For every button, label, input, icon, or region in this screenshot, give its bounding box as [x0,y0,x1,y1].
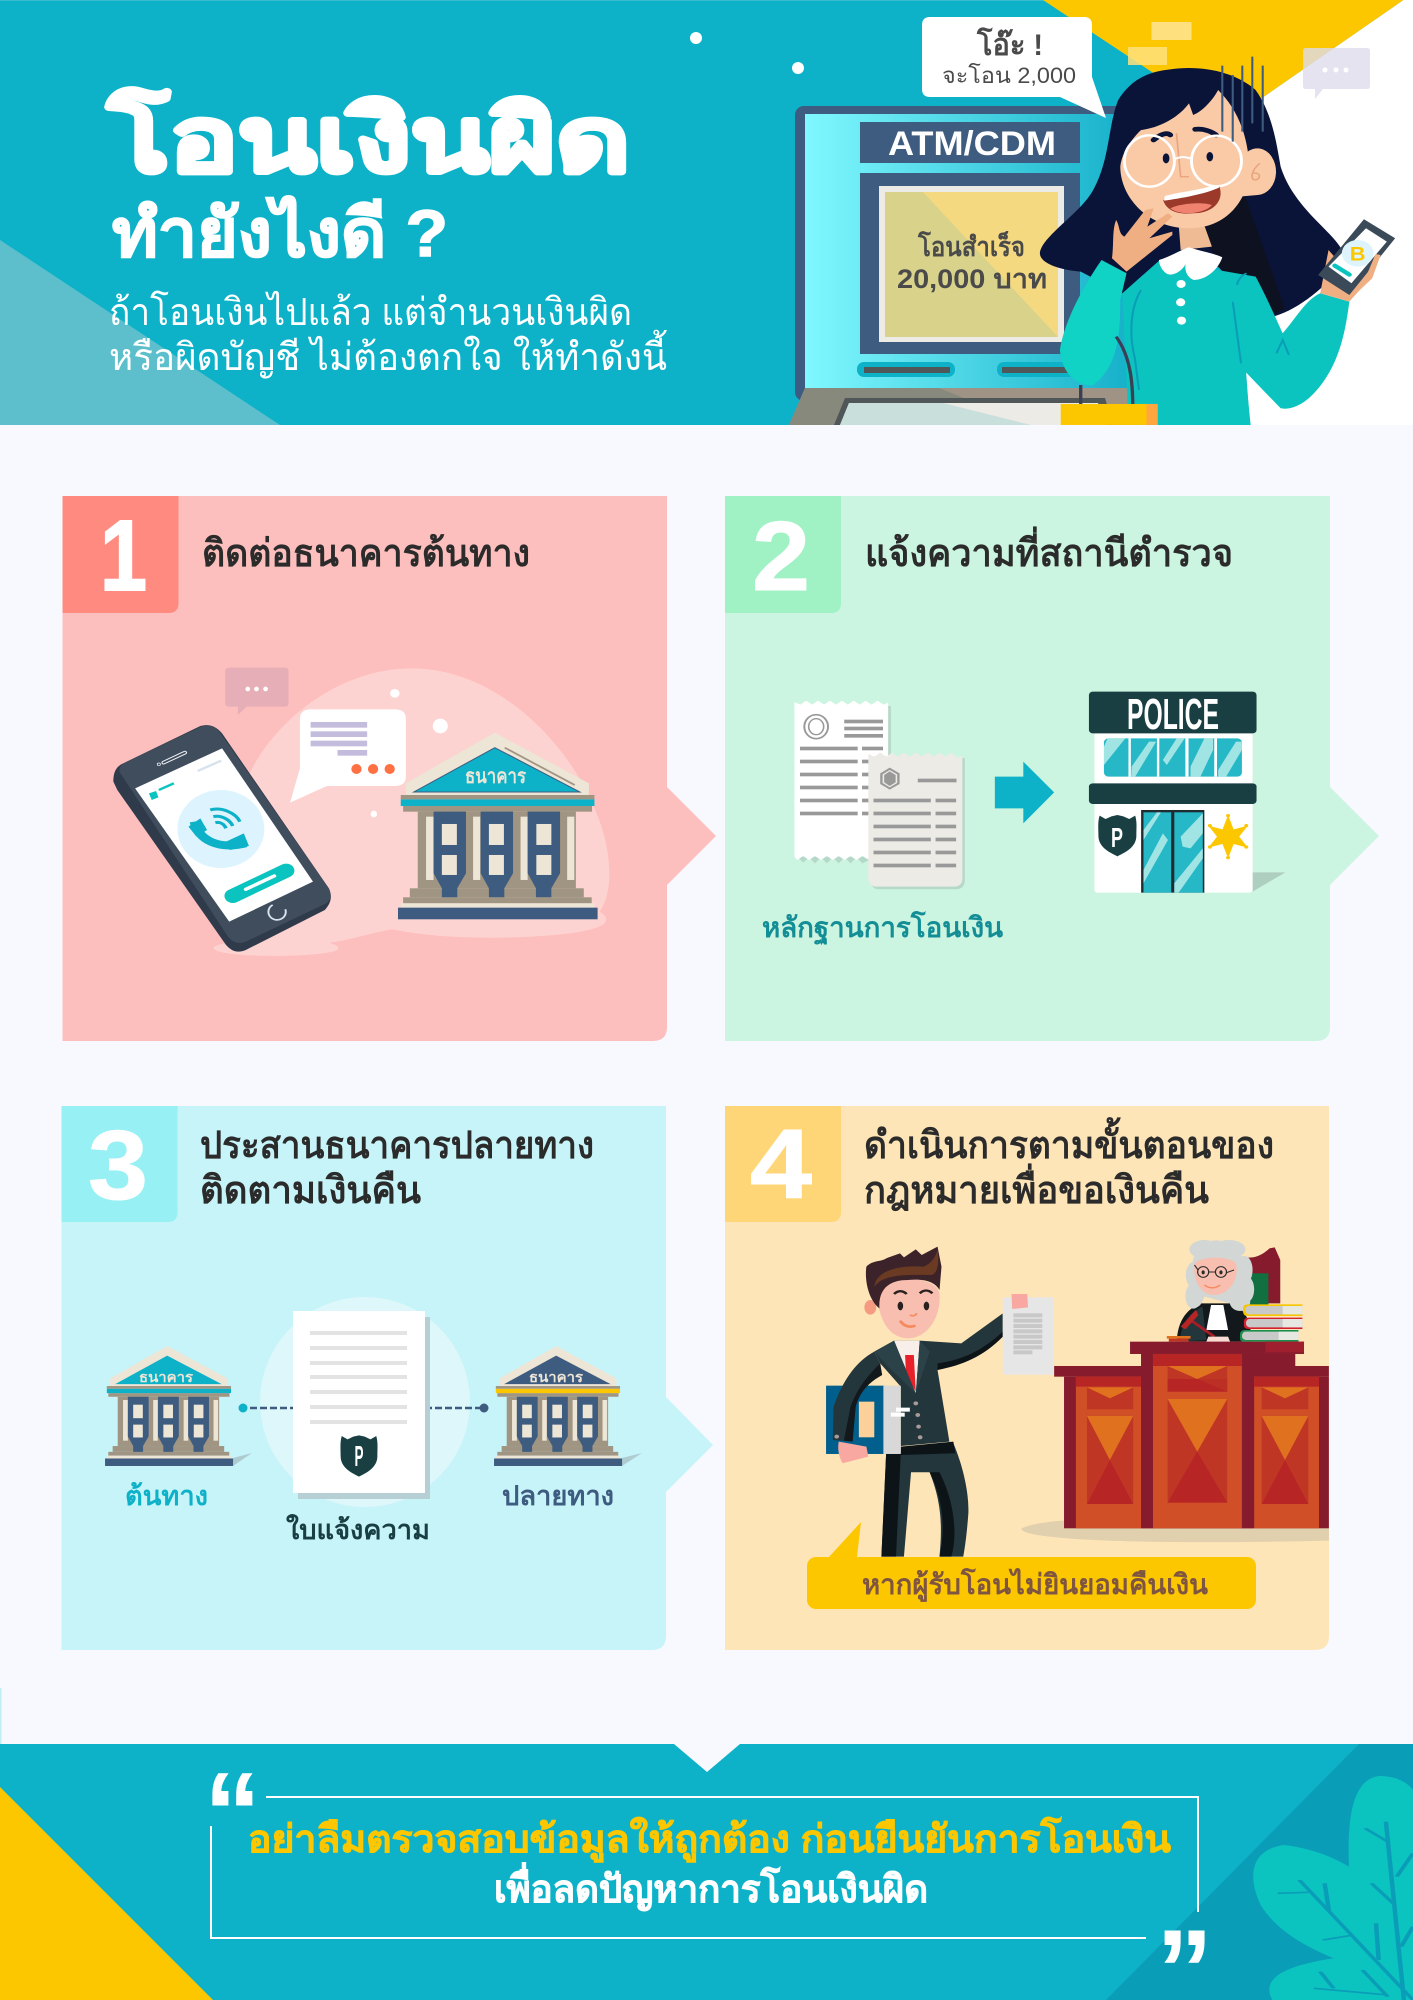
illustration: ATM machine: ATM/CDM [888,125,1056,163]
callout [807,1522,1256,1609]
police sign text: POLICE [1127,690,1219,739]
callout: หากผู้รับโอนไม่ยินยอมคืนเงิน [862,1567,1208,1602]
intro text: หรือผิดบัญชี ไม่ต้องตกใจ ให้ทำดังนี้ [109,329,668,379]
icon: source bank [105,1346,252,1466]
intro text [109,290,668,379]
icon: small chat bubble [1303,48,1370,99]
badge letter: P [1111,822,1123,853]
illustration: ATM machine [789,106,1150,425]
speech bubble: จะโอน 2,000 [942,63,1076,88]
step number badge: 1 [100,500,147,612]
step heading [200,1125,594,1212]
callout frame [211,1797,1198,1938]
connector: source bank to document [238,1404,293,1412]
step heading: ติดต่อธนาคารต้นทาง [202,533,530,575]
panel: header [0,0,1413,425]
labels: ปลายทาง [502,1481,614,1511]
illustration: judge and courtroom desk [1021,1240,1329,1542]
labels: ใบแจ้งความ [286,1514,430,1545]
closing message [248,1816,1171,1911]
bank label: ธนาคาร [465,766,526,788]
evidence label: หลักฐานการโอนเงิน [762,910,1003,946]
step number badge: 4 [750,1109,812,1219]
panel: step 1 [62,496,716,1041]
illustration: ATM machine: 20,000 บาท [897,264,1047,294]
panel: step 4 [725,1106,1329,1650]
step heading: ติดตามเงินคืน [200,1170,421,1212]
step heading: แจ้งความที่สถานีตำรวจ [865,526,1233,575]
document: police report: P [354,1441,364,1473]
step heading: ประสานธนาคารปลายทาง [200,1125,594,1167]
step heading: ดำเนินการตามขั้นตอนของ [864,1117,1274,1167]
icon: opening quote: “ [204,1750,261,1877]
illustration: shocked woman with phone [1040,57,1395,425]
subtitle: ทำยังไงดี ? [112,195,448,270]
step number badge: 3 [88,1110,148,1220]
panel: step 3 [62,1106,713,1650]
document: police report [293,1311,430,1499]
closing message: อย่าลืมตรวจสอบข้อมูลให้ถูกต้อง ก่อนยืนยันการโอนเงิน [248,1816,1171,1863]
icon: source bank: ธนาคาร [139,1369,193,1385]
illustration: man holding document [826,1247,1053,1557]
illustration: transfer evidence and police station [794,692,1285,893]
icon: leaves [1253,1776,1413,2000]
step heading: กฎหมายเพื่อขอเงินคืน [864,1163,1209,1212]
connector: document to destination bank [425,1404,488,1412]
step number badge [725,496,841,613]
illustration: ATM machine: โอนสำเร็จ [917,229,1025,262]
step number badge [725,1106,841,1222]
illustration: shocked woman with phone: B [1350,243,1366,265]
speech bubble [922,17,1106,118]
step number badge: 2 [752,501,810,611]
closing message: เพื่อลดปัญหาการโอนเงินผิด [494,1862,928,1911]
icon: decorative rectangles [1128,22,1192,65]
panel: step 2 [725,496,1379,1041]
icon: destination bank [494,1346,642,1466]
decorative dots [690,32,836,236]
illustration: phone calling bank [113,668,609,956]
panel: footer [0,1688,1413,2000]
step number badge [62,496,178,613]
labels: ต้นทาง [125,1481,208,1511]
speech bubble: โอ๊ะ ! [976,26,1043,62]
step heading [864,1117,1274,1212]
background circle [260,1297,470,1507]
intro text: ถ้าโอนเงินไปแล้ว แต่จำนวนเงินผิด [109,290,632,334]
step number badge [62,1106,178,1222]
title: โอนเงินผิด [107,88,630,191]
labels [125,1481,614,1545]
icon: destination bank: ธนาคาร [529,1369,583,1385]
